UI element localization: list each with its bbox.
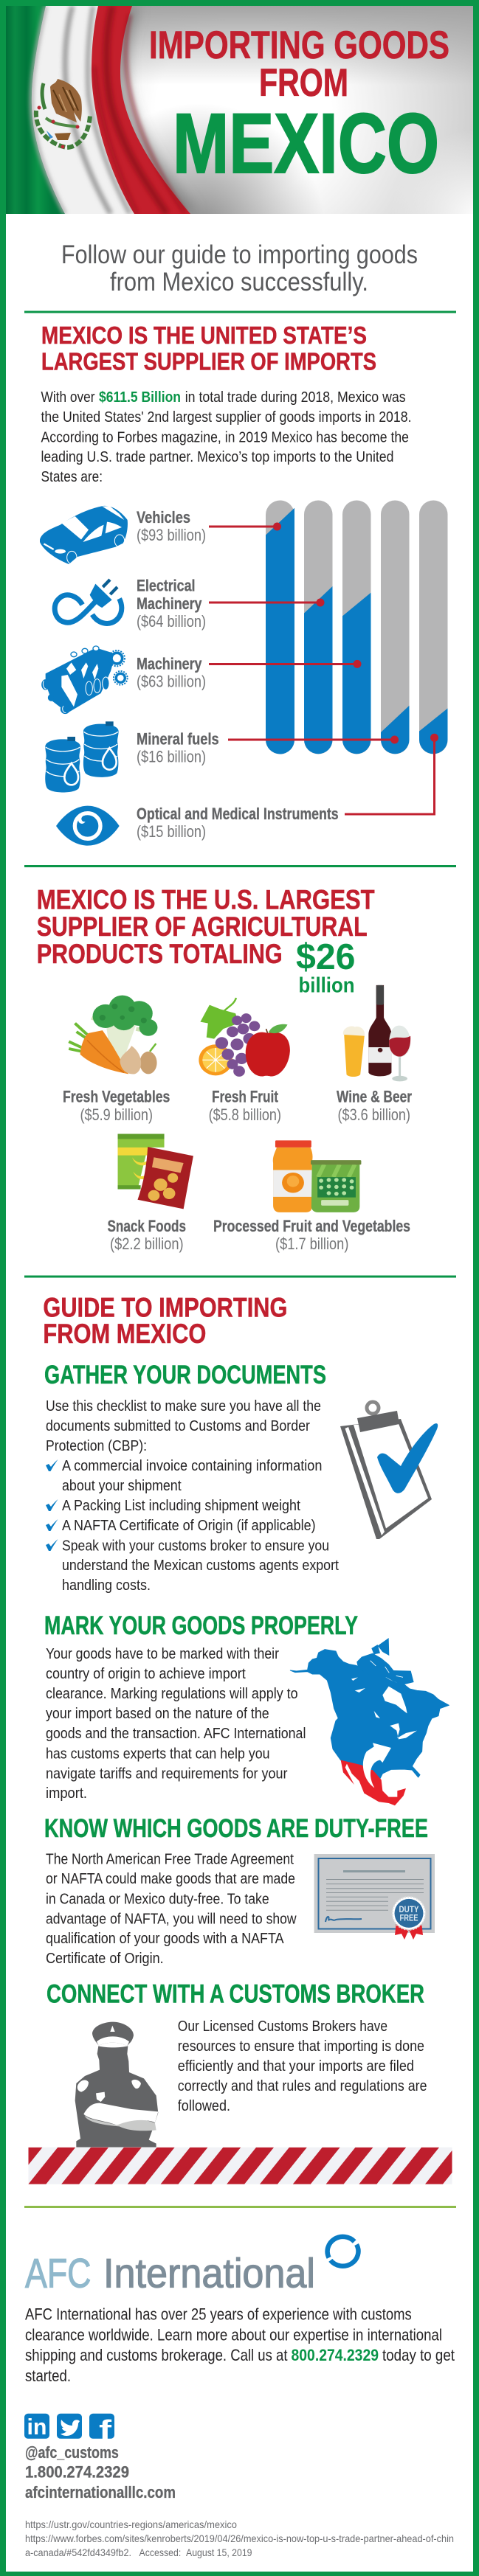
company paragraph: started. [25, 2367, 71, 2385]
logo: AFC International: AFC [25, 2249, 92, 2296]
subtitle [61, 240, 418, 296]
section heading: agricultural products: MEXICO IS THE U.S. LARGEST [37, 885, 375, 914]
map: North America with Mexico highlighted [290, 1638, 449, 1805]
text: marking: import. [46, 1785, 87, 1802]
text: checklist: A NAFTA Certificate of Origin (if applicable) [62, 1518, 316, 1534]
text: checklist [46, 1398, 339, 1594]
flag: white band [32, 6, 134, 214]
callout: $26 billion [296, 937, 356, 997]
flag: red band [92, 6, 190, 214]
section heading: largest supplier of imports: MEXICO IS THE UNITED STATE’S [41, 322, 367, 349]
header banner with Mexican flag [6, 6, 473, 214]
labels: processed fruit and vegetables: Processed Fruit and Vegetables [213, 1217, 410, 1235]
text: NAFTA: The North American Free Trade Agreement [46, 1851, 294, 1867]
section heading: guide to importing: GUIDE TO IMPORTING [43, 1292, 287, 1323]
contact details [25, 2443, 176, 2502]
intro paragraph: According to Forbes magazine, in 2019 Mexico has become the [41, 429, 409, 445]
text: marking: Your goods have to be marked with their [46, 1646, 279, 1662]
labels: wine and beer [337, 1088, 412, 1124]
company paragraph: shipping and customs brokerage. Call us at [25, 2346, 288, 2364]
sources [25, 2518, 454, 2558]
labels: optical and medical instruments: Optical and Medical Instruments [137, 805, 339, 823]
title [149, 24, 449, 191]
labels: mineral fuels [137, 730, 219, 766]
text: checklist: about your shipment [62, 1478, 182, 1494]
labels: wine and beer: ($3.6 billion) [338, 1105, 410, 1124]
icon: wine and beer [343, 985, 410, 1081]
icon: fresh fruit [199, 998, 290, 1077]
icon: machinery [42, 646, 128, 714]
icon: eye [56, 806, 120, 846]
icon: clipboard with check [340, 1402, 438, 1539]
sources: a-canada/#542fd4349fb2. [25, 2547, 131, 2558]
text: marking: country of origin to achieve import [46, 1666, 246, 1682]
bar: mineral fuels [381, 500, 409, 754]
sources: August 15, 2019 [186, 2547, 252, 2558]
contact details: afcinternationalllc.com [25, 2483, 176, 2502]
intro paragraph: in total trade during 2018, Mexico was [185, 389, 406, 406]
intro paragraph: the United States' 2nd largest supplier of goods imports in 2018. [41, 409, 412, 426]
labels: electrical machinery: ($64 billion) [137, 612, 206, 631]
text: customs brokers [178, 2018, 427, 2114]
text: checklist: Protection (CBP): [46, 1438, 147, 1454]
labels: machinery: Machinery [137, 654, 202, 673]
labels: fresh vegetables: Fresh Vegetables [63, 1088, 170, 1106]
text: marking: goods and the transaction. AFC International [46, 1726, 306, 1742]
labels: mineral fuels: ($16 billion) [137, 748, 206, 766]
intro paragraph: With over [41, 389, 95, 406]
bar: machinery [342, 500, 371, 754]
text: marking: clearance. Marking regulations will apply to [46, 1686, 298, 1702]
labels: fresh fruit [209, 1088, 281, 1124]
logo: AFC International [25, 2237, 358, 2296]
subtitle: Follow our guide to importing goods [61, 240, 418, 269]
labels: optical and medical instruments: ($15 billion) [137, 822, 206, 841]
labels: fresh vegetables [63, 1088, 170, 1124]
text: customs brokers: efficiently and that your imports are filed [178, 2058, 414, 2075]
icon: processed fruit and vegetables [273, 1140, 361, 1212]
icon: car [40, 506, 128, 564]
callout: $26 billion: billion [298, 973, 354, 997]
intro paragraph [41, 389, 412, 485]
section heading: agricultural products: SUPPLIER OF AGRICULTURAL [37, 912, 368, 942]
icon: fresh vegetables [69, 996, 157, 1074]
subtitle: from Mexico successfully. [110, 268, 368, 296]
labels: wine and beer: Wine & Beer [337, 1088, 412, 1106]
labels: vehicles: ($93 billion) [137, 526, 206, 544]
labels: optical and medical instruments [137, 805, 339, 841]
flag: green band [6, 6, 65, 214]
company paragraph: 800.274.2329 [291, 2346, 379, 2364]
labels: machinery [137, 654, 206, 690]
text: customs brokers: correctly and that rules and regulations are [178, 2078, 427, 2094]
text: checklist: A Packing List including shipment weight [62, 1498, 300, 1514]
labels: snack foods: ($2.2 billion) [110, 1235, 184, 1253]
text: checklist: understand the Mexican customs agents export [62, 1558, 339, 1574]
logo: AFC International: International [103, 2249, 315, 2296]
bar: optical and medical [419, 500, 447, 754]
text: customs brokers: resources to ensure that importing is done [178, 2038, 424, 2055]
section heading: agricultural products: PRODUCTS TOTALING [37, 939, 283, 969]
bar: vehicles [266, 500, 294, 754]
labels: electrical machinery [137, 577, 206, 631]
company paragraph: AFC International has over 25 years of experience with customs [25, 2305, 412, 2324]
text: customs brokers: Our Licensed Customs Brokers have [178, 2018, 387, 2035]
text: NAFTA: or NAFTA could make goods that are made [46, 1871, 295, 1887]
callout: $26 billion: $26 [296, 937, 356, 977]
labels: electrical machinery: Electrical [137, 577, 195, 595]
labels: snack foods: Snack Foods [108, 1217, 186, 1235]
text: NAFTA: Certificate of Origin. [46, 1951, 164, 1967]
labels: fresh fruit: Fresh Fruit [212, 1088, 279, 1106]
text: customs brokers: followed. [178, 2098, 230, 2114]
intro paragraph: $611.5 Billion [99, 389, 181, 406]
icon: electric plug [55, 580, 122, 623]
contact details: 1.800.274.2329 [25, 2463, 129, 2482]
labels: vehicles [137, 508, 206, 544]
section heading: guide to importing [43, 1292, 287, 1349]
striped barrier [0, 2148, 472, 2184]
heading: mark your goods properly: MARK YOUR GOODS PROPERLY [44, 1611, 358, 1640]
text: NAFTA [46, 1851, 297, 1967]
leader lines [209, 522, 438, 814]
icon: LinkedIn: in [27, 2414, 47, 2440]
icon: oil barrels [45, 721, 119, 792]
icon: duty-free certificate [314, 1854, 435, 1940]
text: NAFTA: advantage of NAFTA, you will need to show [46, 1912, 297, 1928]
text: NAFTA: in Canada or Mexico duty-free. To take [46, 1891, 269, 1907]
title: FROM [259, 61, 348, 105]
icon: Twitter [57, 2414, 82, 2439]
bar: electrical machinery [304, 500, 332, 754]
company paragraph [25, 2305, 455, 2385]
labels: mineral fuels: Mineral fuels [137, 730, 219, 748]
labels: processed fruit and vegetables: ($1.7 billion) [275, 1235, 348, 1253]
text: marking [46, 1646, 306, 1802]
labels: snack foods [108, 1217, 186, 1253]
text: marking: has customs experts that can help you [46, 1746, 270, 1762]
icon: Facebook: f [99, 2414, 112, 2445]
text: NAFTA: qualification of your goods with a NAFTA [46, 1931, 284, 1947]
labels: fresh vegetables: ($5.9 billion) [80, 1105, 153, 1124]
labels: machinery: ($63 billion) [137, 672, 206, 690]
sources: Accessed: [139, 2547, 181, 2558]
intro paragraph: States are: [41, 469, 103, 485]
icon: duty-free certificate: FREE [400, 1913, 418, 1923]
text: checklist: handling costs. [62, 1577, 151, 1594]
text: marking: navigate tariffs and requirements for your [46, 1766, 288, 1782]
text: checklist: documents submitted to Customs and Border [46, 1418, 310, 1434]
labels: vehicles: Vehicles [137, 508, 190, 527]
labels: electrical machinery: Machinery [137, 594, 202, 613]
text: checklist: Use this checklist to make sure you have all the [46, 1398, 321, 1414]
text: checklist: Speak with your customs broker to ensure you [62, 1538, 329, 1555]
section heading: agricultural products [37, 885, 375, 969]
section heading: guide to importing: FROM MEXICO [43, 1319, 206, 1349]
contact details: @afc_customs [25, 2443, 119, 2462]
section heading: largest supplier of imports: LARGEST SUPPLIER OF IMPORTS [41, 347, 376, 375]
sources: https://ustr.gov/countries-regions/americas/mexico [25, 2518, 237, 2530]
labels: processed fruit and vegetables [213, 1217, 410, 1253]
icon: snack foods [118, 1134, 193, 1209]
labels: fresh fruit: ($5.8 billion) [209, 1105, 281, 1124]
heading: gather your documents: GATHER YOUR DOCUMENTS [44, 1361, 326, 1389]
icon: Facebook [89, 2414, 114, 2445]
icon: duty-free certificate: DUTY [399, 1904, 419, 1914]
text: checklist: A commercial invoice containing information [62, 1458, 322, 1474]
company paragraph: today to get [382, 2346, 455, 2364]
bar chart: top imports [266, 500, 447, 754]
icon: customs officer [75, 2022, 158, 2148]
text: marking: your import based on the nature of the [46, 1706, 269, 1722]
flag: coat of arms eagle [36, 79, 90, 149]
intro paragraph: leading U.S. trade partner. Mexico’s top imports to the United [41, 449, 394, 465]
section heading: largest supplier of imports [41, 322, 376, 375]
